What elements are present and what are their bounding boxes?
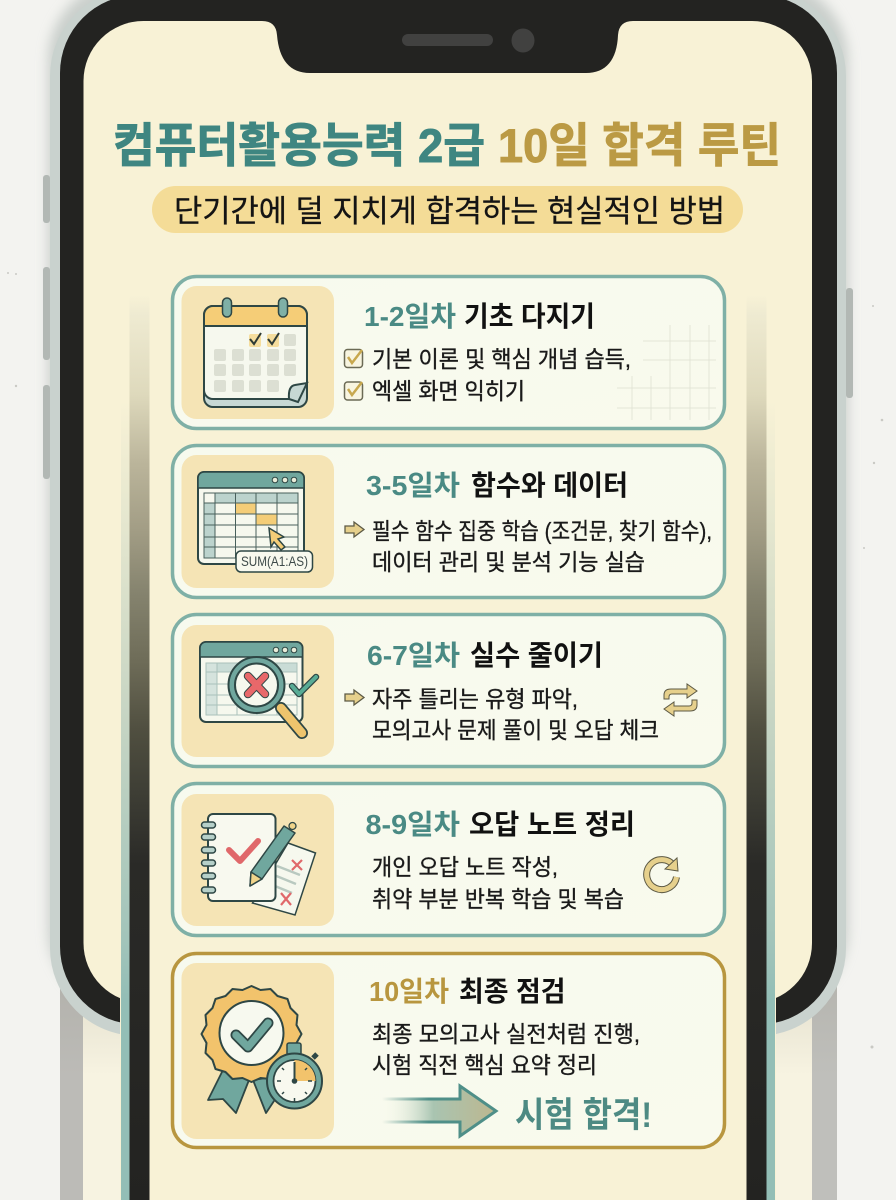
- body text: 시험 직전 핵심 요약 정리: [372, 1052, 597, 1078]
- title: 컴퓨터활용능력 2급: [113, 119, 485, 172]
- card 2: 3-5일차: [172, 446, 724, 598]
- phone frame: [50, 0, 846, 1036]
- heading: 최종 점검: [459, 976, 566, 1007]
- icon: medal and stopwatch: [202, 986, 322, 1113]
- icon panel: [182, 794, 334, 926]
- body text: 최종 모의고사 실전처럼 진행,: [372, 1021, 640, 1047]
- icon: cycle arrows: [664, 684, 697, 716]
- body text: [372, 518, 712, 575]
- speaker: [402, 34, 493, 46]
- card 4: 8-9일차: [172, 784, 724, 936]
- decorative grid: [617, 325, 716, 420]
- formula label: SUM(A1:AS): [241, 554, 308, 569]
- heading: [364, 301, 595, 332]
- central column: [120, 280, 776, 1200]
- title: [113, 119, 781, 172]
- heading: 오답 노트 정리: [469, 809, 635, 840]
- check icons: [344, 350, 362, 400]
- heading: 함수와 데이터: [471, 470, 628, 501]
- body text: [372, 686, 659, 743]
- body text: 필수 함수 집중 학습 (조건문, 찾기 함수),: [372, 518, 712, 544]
- arrow bullet: [345, 690, 364, 705]
- arrow to pass: [382, 1086, 496, 1136]
- body text: 데이터 관리 및 분석 기능 실습: [372, 549, 645, 575]
- heading: 8-9일차: [366, 809, 460, 840]
- heading: [366, 470, 628, 501]
- body text: [372, 1021, 640, 1078]
- card 3: 6-7일차: [172, 614, 724, 766]
- icon: magnifier on spreadsheet: [200, 642, 316, 733]
- heading: 3-5일차: [366, 470, 460, 501]
- icon: notebook and pen: [202, 814, 316, 915]
- arrow bullet: [345, 522, 364, 537]
- icon: calendar: [204, 298, 307, 407]
- icon: spreadsheet: [198, 472, 312, 572]
- lower phone body behind: [60, 980, 837, 1200]
- heading: 1-2일차: [364, 301, 456, 332]
- body text: [372, 346, 631, 404]
- body text: 개인 오답 노트 작성,: [372, 854, 558, 880]
- body text: 기본 이론 및 핵심 개념 습득,: [372, 346, 631, 372]
- notch: [262, 21, 633, 73]
- icon panel: [182, 286, 334, 419]
- icon: refresh: [647, 858, 678, 890]
- body text: [372, 854, 624, 912]
- title: 10일 합격 루틴: [498, 119, 781, 172]
- heading: [369, 976, 566, 1007]
- icon panel: [182, 963, 334, 1139]
- body text: 모의고사 문제 풀이 및 오답 체크: [372, 717, 659, 743]
- icon panel: [182, 455, 334, 588]
- icon panel: [182, 625, 334, 757]
- side buttons: [43, 175, 853, 479]
- heading: [367, 640, 603, 671]
- camera: [512, 28, 534, 52]
- body text: 자주 틀리는 유형 파악,: [372, 686, 578, 712]
- card 1: 1-2일차: [172, 276, 724, 428]
- heading: 6-7일차: [367, 640, 460, 671]
- body text: 취약 부분 반복 학습 및 복습: [372, 886, 624, 912]
- phone soft shadow: [48, 0, 848, 1010]
- heading: 실수 줄이기: [470, 640, 603, 671]
- card 5: 10일차: [172, 954, 724, 1148]
- body text: 엑셀 화면 익히기: [372, 378, 525, 404]
- heading: [366, 809, 635, 840]
- subtitle pill: 단기간에 덜 지치게 합격하는 현실적인 방법: [174, 194, 725, 229]
- heading: 기초 다지기: [464, 301, 595, 332]
- pass label: 시험 합격!: [515, 1096, 652, 1135]
- heading: 10일차: [369, 976, 449, 1007]
